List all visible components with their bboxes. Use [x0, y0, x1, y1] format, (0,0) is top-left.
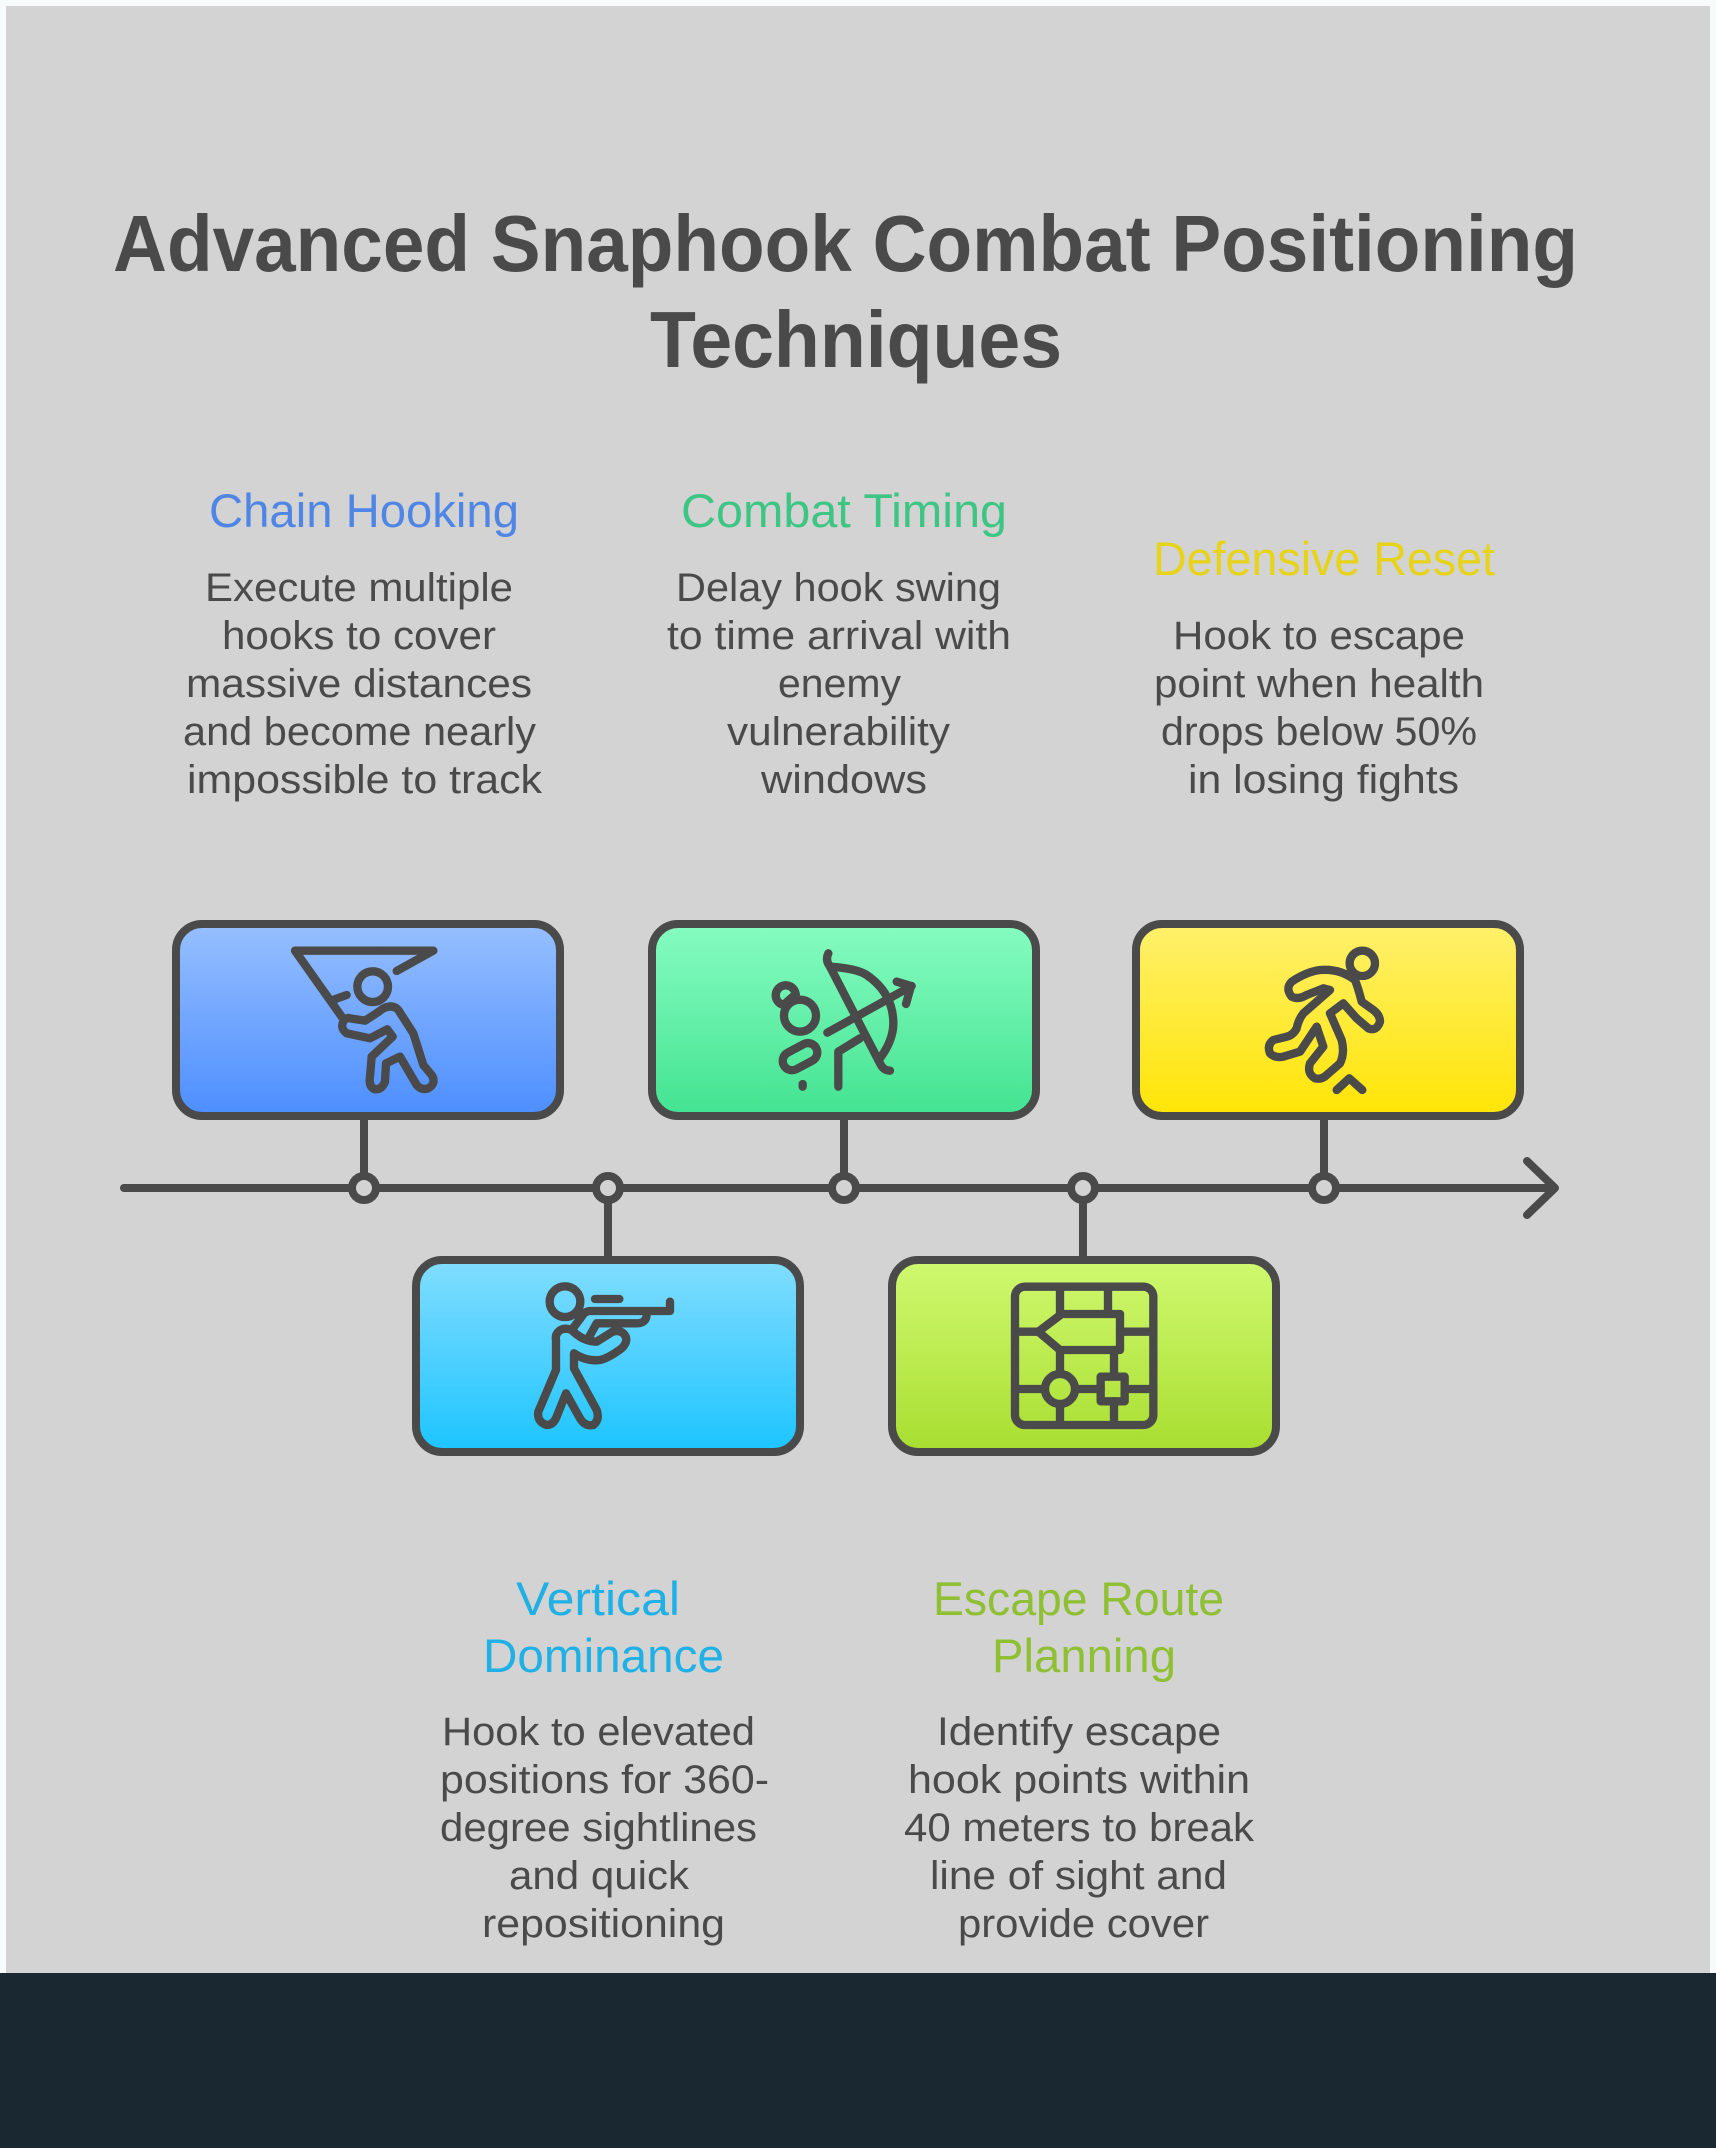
text block: Escape Route Planning	[904, 1572, 1255, 1946]
icon: swinging grapple figure	[295, 951, 434, 1089]
heading: Vertical Dominance: Vertical	[516, 1572, 680, 1625]
description: Vertical Dominance: Hook to elevated	[442, 1710, 755, 1754]
description: Escape Route Planning: provide cover	[958, 1902, 1209, 1946]
icon: running figure	[1269, 951, 1380, 1090]
connector	[352, 1116, 376, 1200]
card: Combat Timing	[652, 924, 1036, 1200]
card: Escape Route Planning	[892, 1176, 1276, 1452]
icon: route flowchart chip	[1015, 1287, 1153, 1425]
heading: Chain Hooking: Chain Hooking	[209, 484, 519, 537]
description: Combat Timing	[667, 566, 1011, 802]
card: Vertical Dominance	[416, 1176, 800, 1452]
icon: bow and arrow	[776, 953, 912, 1087]
heading: Combat Timing: Combat Timing	[681, 484, 1007, 537]
description: Chain Hooking: impossible to track	[187, 758, 543, 802]
icon box	[892, 1260, 1276, 1452]
heading: Defensive Reset: Defensive Reset	[1153, 532, 1495, 585]
title: Advanced Snaphook Combat Positioning	[113, 199, 1578, 288]
text block: Chain Hooking	[183, 484, 543, 802]
description: Defensive Reset: in losing fights	[1188, 758, 1459, 802]
description: Vertical Dominance: degree sightlines	[440, 1806, 757, 1850]
description: Defensive Reset: Hook to escape	[1173, 614, 1465, 658]
heading: Escape Route Planning: Planning	[992, 1629, 1176, 1682]
description: Chain Hooking: Execute multiple	[205, 566, 513, 610]
description: Combat Timing: to time arrival with	[667, 614, 1011, 658]
description: Chain Hooking: hooks to cover	[222, 614, 496, 658]
description: Vertical Dominance: repositioning	[482, 1902, 725, 1946]
description: Defensive Reset: point when health	[1154, 662, 1484, 706]
description: Escape Route Planning: hook points within	[908, 1758, 1250, 1802]
icon box	[652, 924, 1036, 1116]
description: Combat Timing: vulnerability	[727, 710, 950, 754]
description: Defensive Reset: drops below 50%	[1161, 710, 1477, 754]
title: Techniques	[650, 295, 1062, 384]
icon: rifle shooter	[538, 1286, 670, 1425]
icon box	[1136, 924, 1520, 1116]
description: Defensive Reset	[1154, 614, 1484, 802]
heading: Vertical Dominance: Dominance	[483, 1629, 724, 1682]
text block: Combat Timing	[667, 484, 1011, 802]
connector	[1071, 1176, 1095, 1260]
connector	[596, 1176, 620, 1260]
description: Vertical Dominance: positions for 360-	[440, 1758, 769, 1802]
description: Escape Route Planning: line of sight and	[930, 1854, 1227, 1898]
card: Defensive Reset	[1136, 924, 1520, 1200]
heading: Escape Route Planning	[933, 1572, 1224, 1682]
card: Chain Hooking	[176, 924, 560, 1200]
text block: Defensive Reset	[1153, 532, 1495, 802]
connector	[1312, 1116, 1336, 1200]
description: Combat Timing: enemy	[778, 662, 901, 706]
description: Escape Route Planning	[904, 1710, 1255, 1946]
heading: Escape Route Planning: Escape Route	[933, 1572, 1224, 1625]
description: Combat Timing: windows	[760, 758, 927, 802]
timeline axis with arrow	[124, 1161, 1555, 1215]
text block: Vertical Dominance	[440, 1572, 769, 1946]
icon box	[416, 1260, 800, 1452]
description: Chain Hooking: and become nearly	[183, 710, 536, 754]
footer band	[0, 1973, 1716, 2148]
description: Escape Route Planning: Identify escape	[937, 1710, 1221, 1754]
description: Escape Route Planning: 40 meters to break	[904, 1806, 1255, 1850]
title	[113, 199, 1578, 384]
icon box	[176, 924, 560, 1116]
connector	[832, 1116, 856, 1200]
description: Vertical Dominance: and quick	[509, 1854, 690, 1898]
description: Combat Timing: Delay hook swing	[676, 566, 1001, 610]
description: Chain Hooking: massive distances	[186, 662, 532, 706]
description: Chain Hooking	[183, 566, 543, 802]
description: Vertical Dominance	[440, 1710, 769, 1946]
heading: Vertical Dominance	[483, 1572, 724, 1682]
